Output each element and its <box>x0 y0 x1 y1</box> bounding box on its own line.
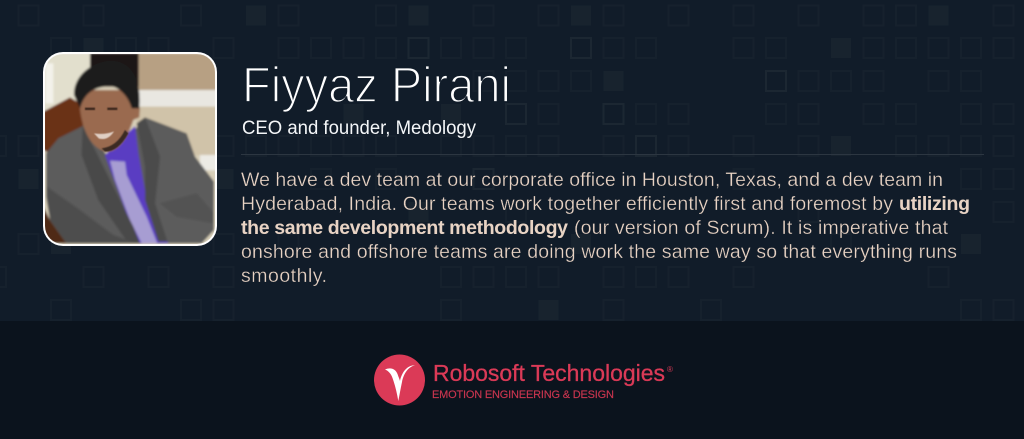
footer band <box>0 321 1024 439</box>
quote body text: We have a dev team at our corporate office in Houston, Texas, and a dev team in <box>241 169 943 191</box>
quote body text: Hyderabad, India. Our teams work together efficiently first and foremost by <box>241 193 893 215</box>
quote body text: utilizing <box>899 193 970 215</box>
logo: Robosoft Technologies <box>374 354 673 406</box>
divider <box>241 154 984 155</box>
background square pattern <box>0 6 1014 320</box>
quote body text: (our version of Scrum). It is imperative that <box>574 217 949 239</box>
name heading: Fiyyaz Pirani <box>242 57 511 113</box>
registered mark: ® <box>667 365 673 374</box>
job title: CEO and founder, Medology <box>242 118 476 139</box>
portrait photo <box>43 52 217 247</box>
logo tagline: EMOTION ENGINEERING & DESIGN <box>432 389 614 401</box>
quote body text: the same development methodology <box>241 217 568 239</box>
background panel <box>0 0 1024 321</box>
logo mark <box>374 354 425 406</box>
quote body text: smoothly. <box>241 265 327 287</box>
logo wordmark: Robosoft Technologies <box>433 360 665 386</box>
quote body text: onshore and offshore teams are doing work the same way so that everything runs <box>241 241 957 263</box>
quote body text <box>241 169 970 287</box>
